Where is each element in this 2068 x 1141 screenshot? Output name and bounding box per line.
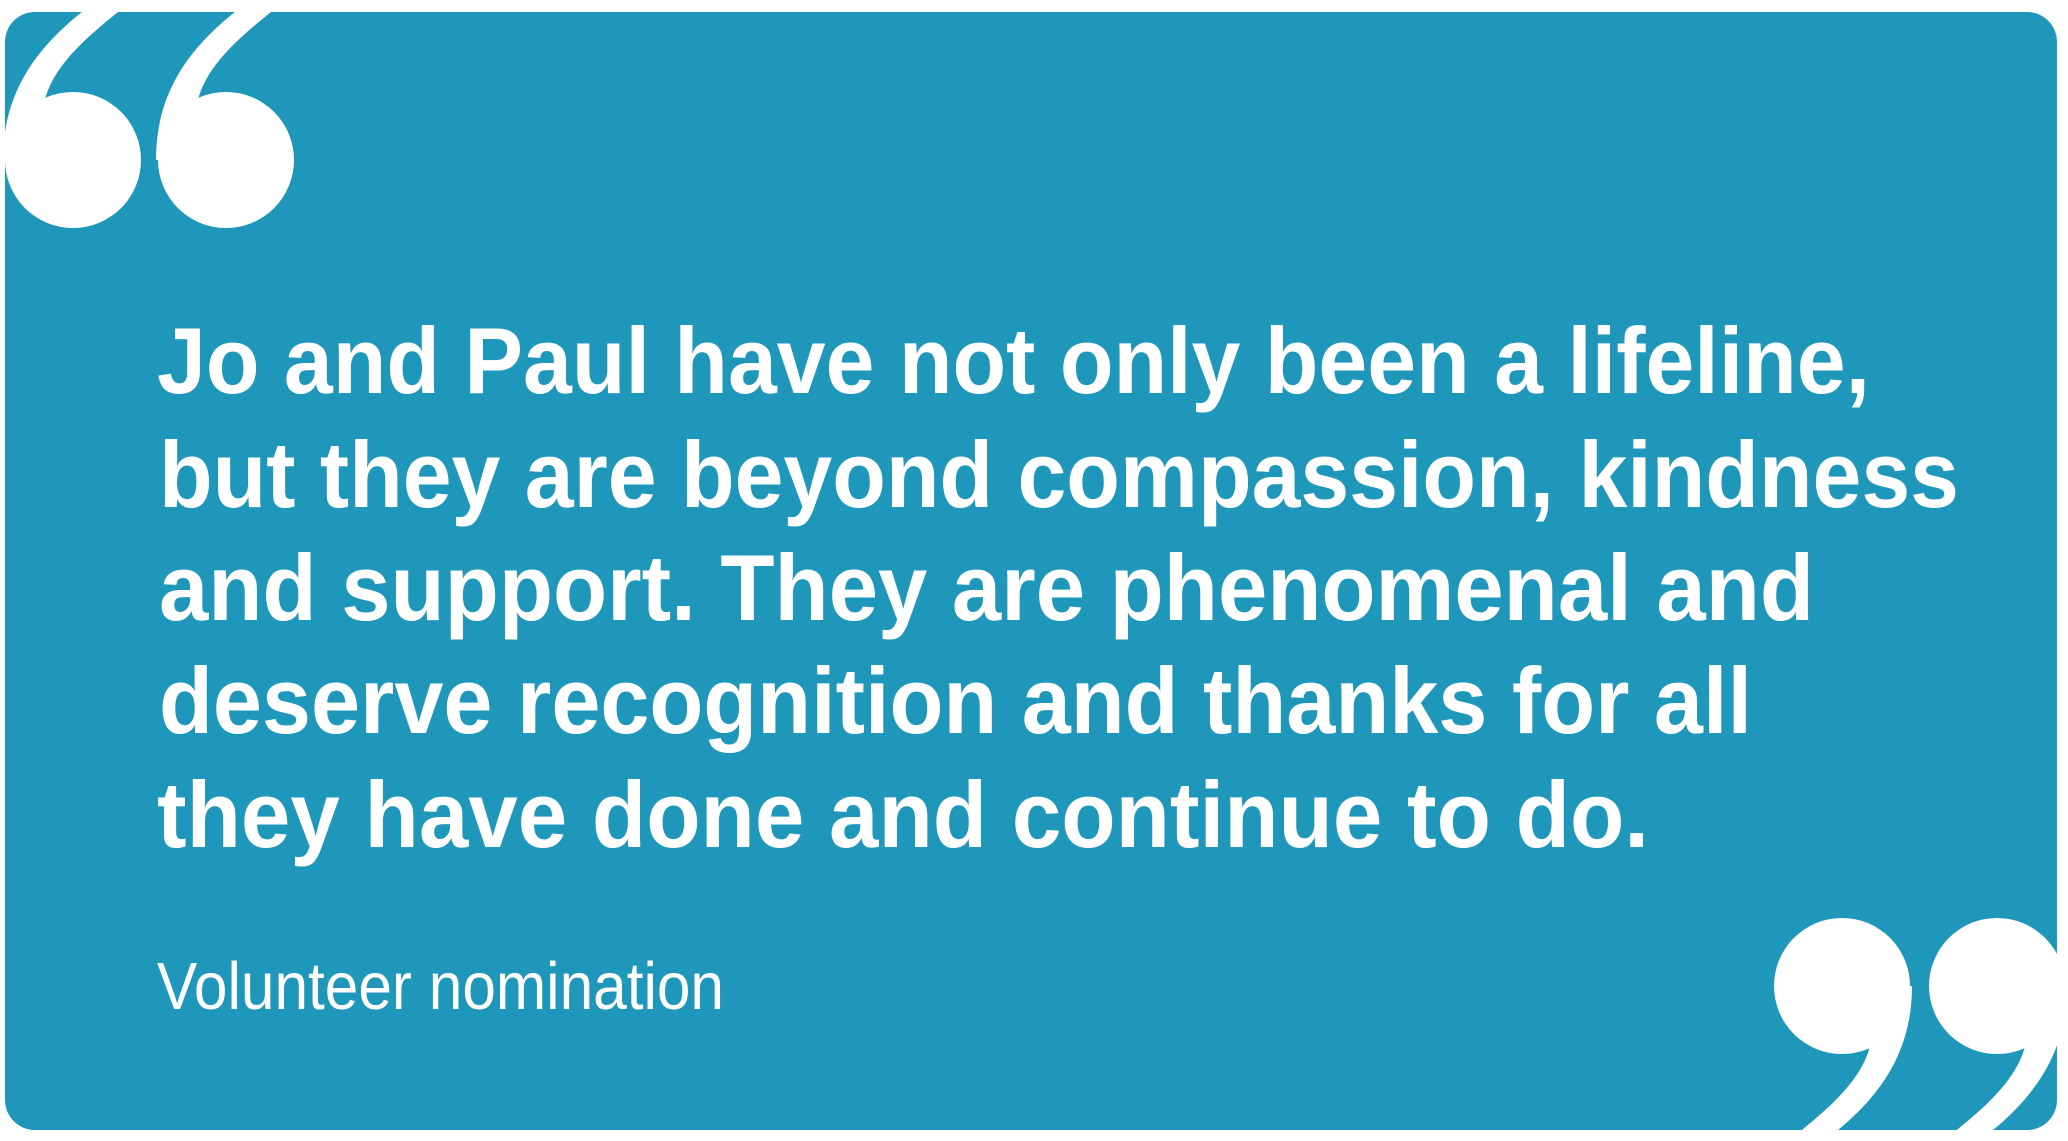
quote text: but they are beyond compassion, kindness <box>159 422 1959 527</box>
icon: opening quotation marks <box>3 8 294 228</box>
attribution: Volunteer nomination <box>157 949 724 1024</box>
quote text: they have done and continue to do. <box>157 762 1649 867</box>
quote text: and support. They are phenomenal and <box>159 535 1814 640</box>
quote text <box>157 308 1959 867</box>
quote text: deserve recognition and thanks for all <box>159 648 1752 753</box>
quote text: Jo and Paul have not only been a lifeline, <box>157 308 1870 413</box>
icon: closing quotation marks <box>1774 918 2067 1138</box>
